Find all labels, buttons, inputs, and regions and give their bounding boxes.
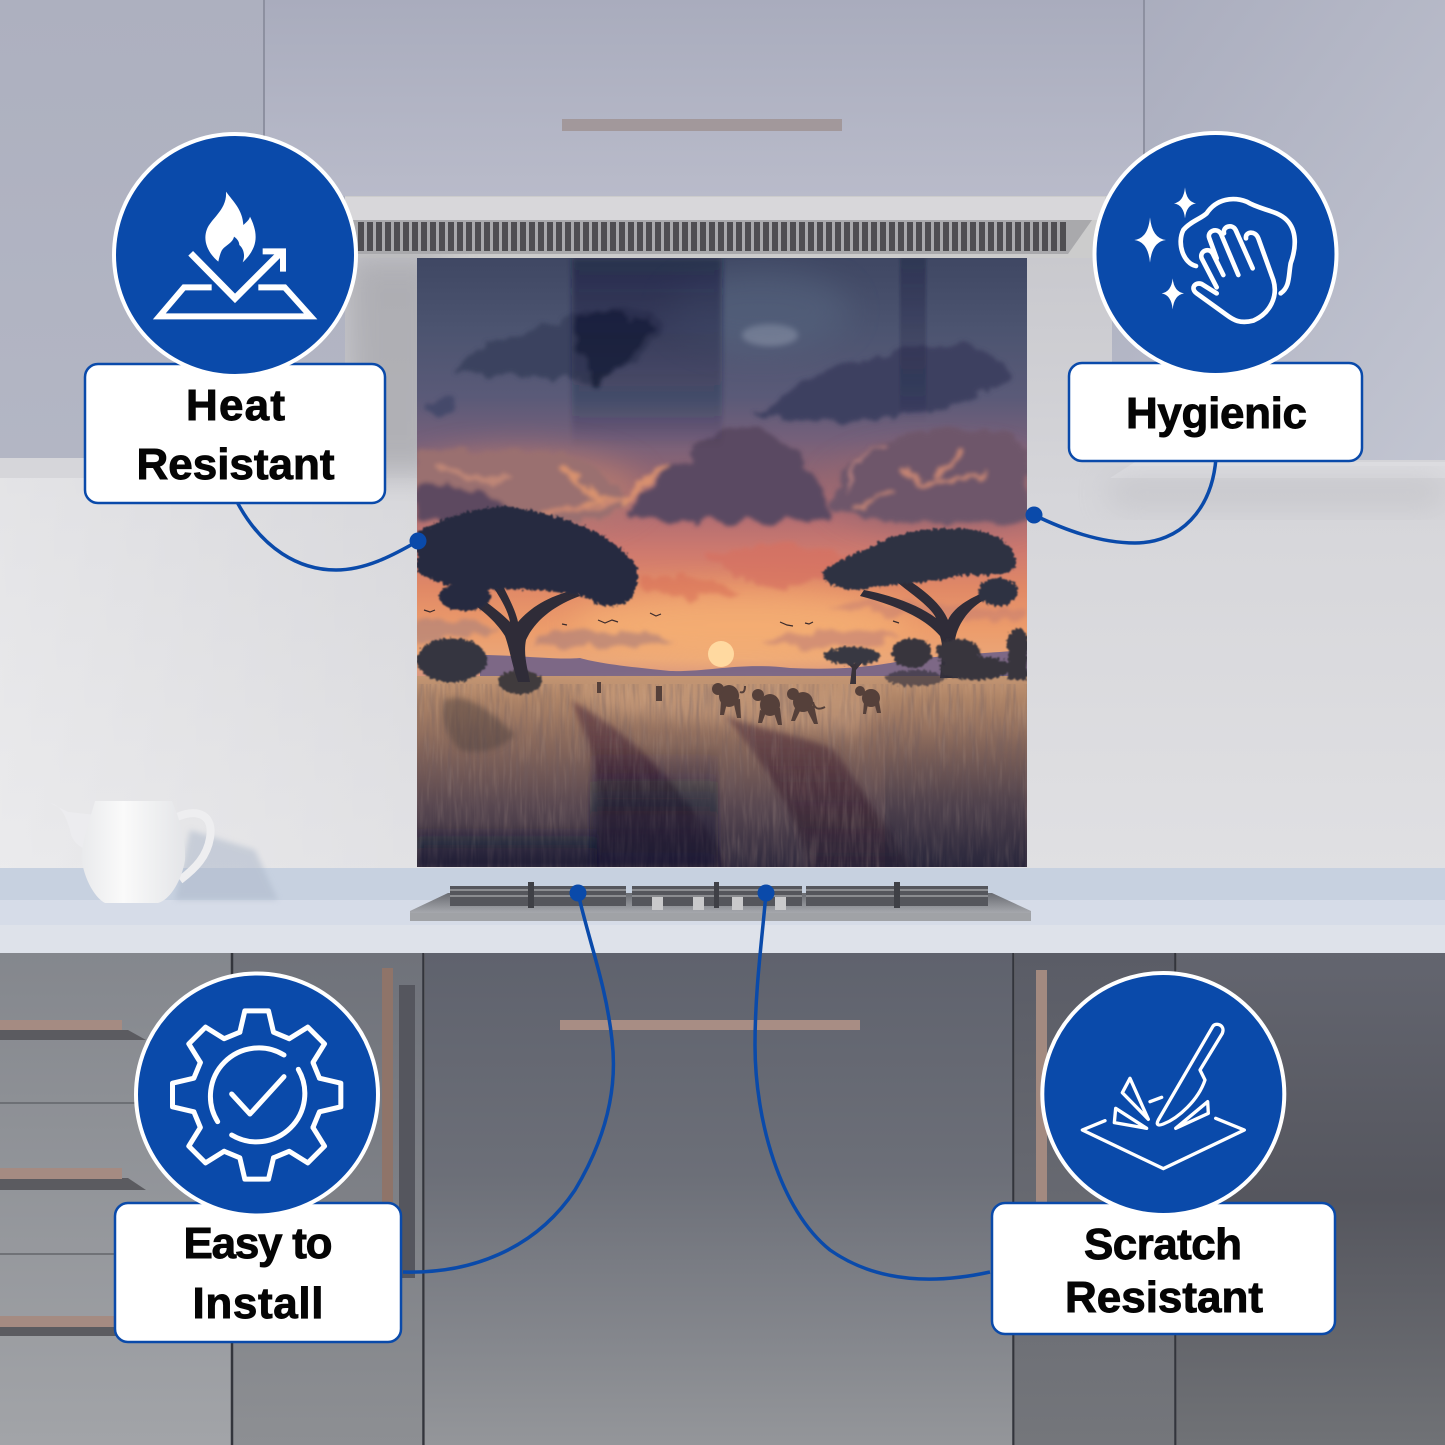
icon badge: scratch resistant: [1042, 973, 1284, 1215]
left door: [233, 953, 423, 1445]
drawer handles: [0, 1020, 125, 1327]
icon badge: heat resistant: [114, 134, 356, 376]
wall: [0, 258, 1445, 878]
pink-orange clouds near sun: [417, 545, 1027, 649]
left door handle: [382, 968, 393, 1202]
reflection bands: [572, 258, 722, 448]
counter top: [0, 900, 1445, 926]
connector: hygienic: [1026, 458, 1216, 543]
upper cabinet handle: [562, 119, 842, 131]
heading: heat resistant: Resistant: [136, 440, 335, 489]
label box: heat resistant: [85, 364, 385, 503]
hood vent slats: [358, 222, 1066, 251]
gas hob: [410, 882, 1031, 921]
counter front: [0, 925, 1445, 954]
left drawers: [0, 953, 232, 1445]
label box: scratch resistant: [992, 1203, 1335, 1334]
distant hills: [480, 650, 1027, 676]
shadow under right cabinet: [1110, 478, 1445, 508]
label box: hygienic: [1069, 363, 1362, 461]
distant lions: [597, 682, 662, 701]
heading: easy to install: Install: [192, 1279, 324, 1328]
left cabinet lip: [0, 458, 100, 478]
warm glow: [570, 589, 910, 661]
right cabinet: [1177, 953, 1445, 1445]
hood front: [345, 197, 1105, 220]
connector: heat resistant: [236, 500, 426, 570]
left acacia tree: [417, 506, 638, 682]
lion 4: [855, 686, 881, 714]
connector: scratch resistant: [755, 884, 990, 1279]
burner caps: [528, 882, 900, 908]
teapot shadow: [175, 830, 278, 900]
heading: hygienic: Hygienic: [1126, 389, 1307, 438]
hob base: [410, 893, 1031, 921]
wall lighting: [0, 478, 1445, 870]
upper centre cabinet: [265, 0, 1143, 196]
drawer seams: [0, 1103, 232, 1254]
sun: [708, 641, 734, 667]
right acacia tree: [822, 529, 1018, 678]
purple-orange cloud bank: [417, 427, 1027, 524]
wall shadow under hood: [345, 254, 445, 474]
right cabinet lip: [1110, 462, 1445, 478]
sky highlight: [742, 324, 798, 346]
lion 2: [752, 689, 782, 725]
distant shrubs: [550, 678, 900, 682]
icon badge: easy to install: [136, 974, 378, 1216]
centre cabinet: [425, 953, 1013, 1445]
grass texture: [417, 684, 1027, 867]
icon: gear with check mark: [172, 1011, 341, 1179]
knobs: [652, 897, 786, 910]
backsplash band: [0, 868, 1445, 902]
lion 1: [712, 683, 745, 718]
cabinet seams: [264, 0, 1144, 196]
heading: scratch resistant: Resistant: [1065, 1273, 1263, 1322]
grates: [450, 886, 988, 906]
drawer handle shadows: [0, 1030, 146, 1336]
icon badge: hygienic: [1094, 133, 1336, 375]
small distant acacia: [824, 647, 880, 684]
upper right cabinet: [1112, 0, 1445, 460]
heading: scratch resistant: Scratch: [1084, 1220, 1242, 1269]
lions walking: [597, 682, 881, 725]
savanna ground: [417, 676, 1027, 867]
heading: easy to install: Easy to: [184, 1219, 332, 1268]
warm cloud glow: [441, 437, 638, 494]
orange cloud highlights: [440, 445, 990, 515]
birds: [424, 610, 899, 626]
left door handle shadow: [399, 985, 415, 1278]
left dirt track: [571, 700, 727, 867]
sky: [417, 258, 1027, 688]
cabinet gaps: [232, 953, 1176, 1445]
icon: flame over surface with deflecting arrow: [159, 192, 311, 316]
lion 3: [787, 688, 825, 724]
dark cloud upper right: [752, 344, 1009, 421]
panel: savanna sunset glass splashback: [400, 258, 1050, 867]
teapot: [50, 801, 211, 903]
sunlit path area: [560, 686, 880, 735]
connector: easy to install: [403, 884, 613, 1272]
right dirt track: [725, 716, 912, 867]
hood vent: [352, 220, 1092, 254]
bushes behind right tree: [885, 628, 1029, 686]
left bush and shrubs: [417, 638, 542, 752]
right door handle: [1036, 970, 1047, 1204]
right door: [1015, 953, 1175, 1445]
dark cloud upper left: [428, 307, 665, 417]
heading: heat resistant: Heat: [186, 381, 285, 430]
centre handle: [560, 1020, 860, 1030]
upper left cabinet: [0, 0, 345, 458]
icon: hand wiping with cloth and sparkles: [1134, 187, 1295, 322]
label box: easy to install: [115, 1203, 401, 1342]
icon: knife scratching a surface: [1082, 1024, 1244, 1169]
